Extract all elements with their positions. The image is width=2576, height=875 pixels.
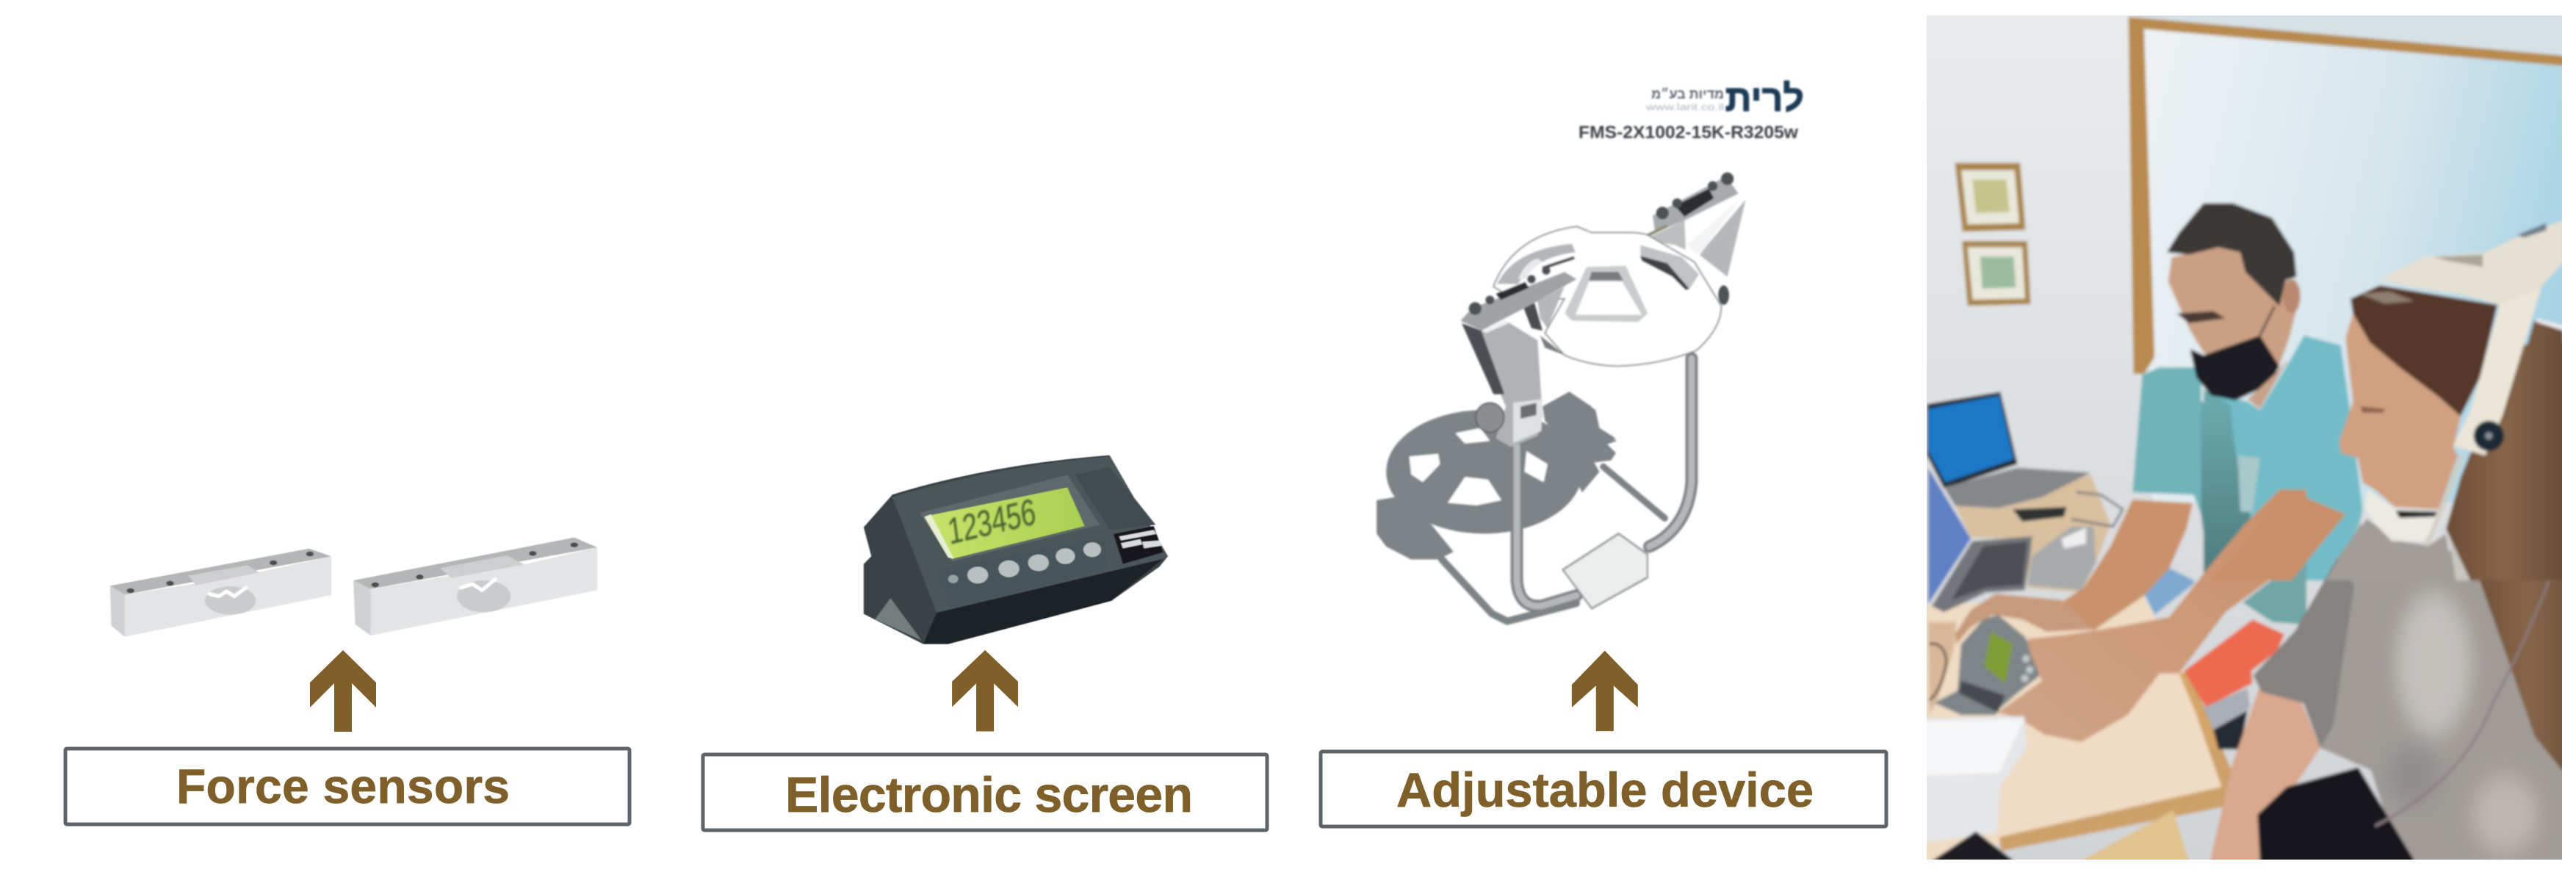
room background bbox=[1917, 0, 2576, 875]
laptops, table, hands, device bbox=[1927, 367, 2306, 749]
heads: man and woman bbox=[2167, 204, 2564, 580]
label box: force sensors: Force sensors bbox=[176, 759, 510, 813]
man's torso upper bbox=[2204, 336, 2363, 580]
logo: Larit: מדיות בע״מ bbox=[1651, 87, 1724, 101]
label box: electronic screen: Electronic screen bbox=[785, 767, 1193, 823]
man's near arm bbox=[2211, 489, 2345, 580]
arrow: force sensors bbox=[310, 650, 376, 732]
logo: Larit: לרית bbox=[1725, 78, 1804, 119]
icon: adjustable head device bbox=[1377, 173, 1746, 622]
icon: electronic indicator bbox=[864, 455, 1168, 644]
panel: electronic screen bbox=[703, 455, 1267, 830]
LCD digits: 123456 bbox=[945, 491, 1038, 552]
label box: adjustable device bbox=[1321, 752, 1886, 827]
model number: FMS-2X1002-15K-R3205w bbox=[1579, 123, 1798, 143]
woman body, white box, lower hair bbox=[1917, 340, 2576, 875]
arrow: adjustable device bbox=[1572, 651, 1638, 731]
label box: force sensors bbox=[65, 749, 629, 824]
panel: adjustable device bbox=[1321, 78, 1886, 827]
arrow: electronic screen bbox=[952, 650, 1018, 732]
photo: device in use bbox=[1917, 0, 2576, 875]
label box: electronic screen bbox=[703, 755, 1267, 830]
logo: Larit bbox=[1645, 78, 1804, 119]
logo: Larit: www.larit.co.il bbox=[1645, 101, 1724, 112]
icon: two force sensors bbox=[110, 538, 597, 637]
label box: adjustable device: Adjustable device bbox=[1396, 763, 1814, 817]
panel: force sensors bbox=[65, 538, 629, 824]
